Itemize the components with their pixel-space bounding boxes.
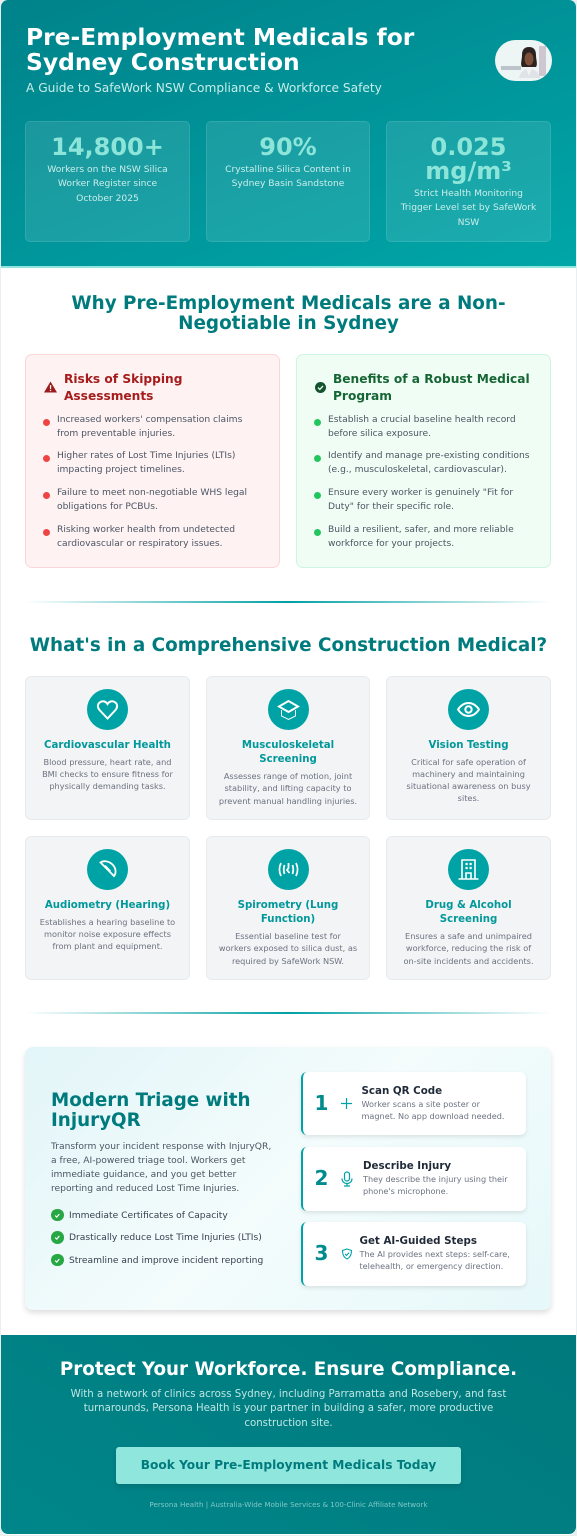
card: vision — [386, 676, 551, 820]
stat: trigger level: mg/m³ — [425, 157, 512, 185]
step 1: 1 — [314, 1090, 328, 1114]
step 2: 2 — [314, 1166, 328, 1190]
panel: InjuryQR — [25, 1047, 551, 1310]
risk list: Increased workers' compensation claims — [57, 414, 242, 424]
risk list: Higher rates of Lost Time Injuries (LTIs) — [57, 451, 235, 461]
title: Sydney Construction — [26, 48, 300, 76]
checklist — [51, 1209, 263, 1266]
benefits heading: Benefits of a Robust Medical — [333, 372, 530, 386]
footer panel — [1, 1335, 576, 1534]
risk list: Risking worker health from undetected — [57, 524, 235, 534]
card: musculoskeletal: Assesses range of motion, joint — [224, 771, 352, 781]
step 1 — [300, 1072, 526, 1135]
title — [26, 22, 414, 76]
step 1: magnet. No app download needed. — [362, 1111, 504, 1121]
footer description: construction site. — [244, 1418, 333, 1429]
InjuryQR description: immediate guidance, and you get better — [51, 1170, 236, 1180]
call to action button: Book Your Pre-Employment Medicals Today — [141, 1458, 436, 1472]
card: drug and alcohol: Ensures a safe and unimpaired — [405, 931, 532, 941]
benefit list: Identify and manage pre-existing conditions — [328, 451, 530, 461]
footer heading: Protect Your Workforce. Ensure Compliance. — [60, 1358, 517, 1380]
footer note: Persona Health | Australia-Wide Mobile Services & 100-Clinic Affiliate Network — [149, 1500, 428, 1509]
card: spirometry: Function) — [261, 914, 315, 925]
card: drug and alcohol: Screening — [440, 914, 497, 925]
benefits heading: Program — [333, 388, 392, 402]
stat: silica content: Crystalline Silica Content in — [225, 165, 351, 175]
card: vision: situational awareness on busy — [406, 781, 531, 791]
heading: why: Why Pre-Employment Medicals are a Non- — [71, 293, 506, 314]
icon: doctor photo — [495, 40, 552, 81]
card: cardiovascular — [25, 676, 190, 820]
card: spirometry: required by SafeWork NSW. — [232, 956, 344, 966]
step 2: phone's microphone. — [363, 1186, 448, 1196]
stat: trigger level: Strict Health Monitoring — [414, 189, 523, 199]
call to action button — [116, 1447, 461, 1484]
InjuryQR description: Transform your incident response with InjuryQR, — [51, 1142, 271, 1152]
step 2: Describe Injury — [363, 1160, 451, 1172]
stat: silica content: 90% — [259, 132, 317, 160]
card: audiometry: Establishes a hearing baseline to — [40, 916, 175, 926]
step 3: Get AI-Guided Steps — [360, 1235, 477, 1247]
benefit list: Duty" for their specific role. — [328, 502, 454, 512]
step 2: They describe the injury using their — [363, 1174, 508, 1184]
card: spirometry: Spirometry (Lung — [238, 900, 338, 911]
benefit list: Build a resilient, safer, and more reliable — [328, 524, 514, 534]
card: cardiovascular: physically demanding tasks. — [49, 781, 166, 791]
card: spirometry — [206, 836, 370, 980]
benefit list: Establish a crucial baseline health record — [328, 414, 516, 424]
card: musculoskeletal: Musculoskeletal — [242, 740, 334, 751]
risks heading: Risks of Skipping — [64, 372, 182, 386]
card: spirometry: Essential baseline test for — [235, 931, 341, 941]
checklist: Drastically reduce Lost Time Injuries (LTIs) — [69, 1233, 262, 1243]
heading: why: Negotiable in Sydney — [178, 313, 399, 334]
risk list: impacting project timelines. — [57, 465, 185, 475]
card: vision: Critical for safe operation of — [411, 756, 526, 766]
risk list — [43, 414, 247, 549]
stat: workers on register: Workers on the NSW Silica — [47, 165, 168, 175]
risk list: from preventable injuries. — [57, 429, 175, 439]
risk list: Failure to meet non-negotiable WHS legal — [57, 488, 247, 498]
InjuryQR description: a free, AI-powered triage tool. Workers get — [51, 1156, 245, 1166]
card: vision: machinery and maintaining — [412, 769, 525, 779]
stat: trigger level: Trigger Level set by SafeWork — [401, 203, 536, 213]
stat: workers on register: 14,800+ — [51, 132, 164, 160]
footer description — [71, 1389, 506, 1429]
card: audiometry: monitor noise exposure effects — [44, 929, 171, 939]
stat: silica content — [206, 121, 370, 242]
heading: why — [71, 293, 506, 334]
subtitle: A Guide to SafeWork NSW Compliance & Workforce Safety — [26, 80, 382, 94]
card: musculoskeletal: Screening — [259, 754, 317, 765]
checklist: Immediate Certificates of Capacity — [69, 1210, 228, 1220]
card: drug and alcohol: workforce, reducing the risk of — [406, 943, 531, 953]
step 3: telehealth, or emergency direction. — [360, 1261, 503, 1271]
stat: trigger level: NSW — [458, 218, 479, 228]
card: vision: Vision Testing — [428, 740, 509, 751]
card: musculoskeletal: stability, and lifting capacity to — [225, 783, 351, 793]
stat: trigger level — [386, 121, 551, 242]
card: cardiovascular: BMI checks to ensure fitness for — [42, 769, 173, 779]
risk list: obligations for PCBUs. — [57, 502, 158, 512]
benefit list: before silica exposure. — [328, 429, 431, 439]
card: vision: sites. — [458, 793, 479, 803]
benefit list: workforce for your projects. — [328, 539, 454, 549]
InjuryQR description: reporting and reduced Lost Time Injuries. — [51, 1184, 239, 1194]
InjuryQR heading: Modern Triage with — [51, 1090, 250, 1110]
risks heading — [64, 372, 182, 402]
step 3: 3 — [314, 1241, 328, 1265]
step 3: The AI provides next steps: self-care, — [360, 1249, 510, 1259]
stat: workers on register: October 2025 — [76, 194, 139, 204]
header panel — [1, 0, 576, 268]
InjuryQR heading: InjuryQR — [51, 1110, 141, 1131]
icon: check circle — [315, 382, 326, 393]
step 3 — [300, 1222, 526, 1286]
card: audiometry — [25, 836, 190, 980]
card: cardiovascular: Cardiovascular Health — [44, 740, 171, 751]
stat: trigger level: 0.025 — [431, 132, 506, 160]
card: cardiovascular: Blood pressure, heart rate, and — [44, 756, 171, 766]
card: audiometry: from plant and equipment. — [52, 941, 163, 951]
benefit list — [314, 414, 530, 549]
benefits heading — [333, 372, 530, 402]
icon: warning — [44, 382, 57, 392]
title: Pre-Employment Medicals for — [26, 22, 414, 50]
risk list: cardiovascular or respiratory issues. — [57, 539, 223, 549]
footer description: With a network of clinics across Sydney, including Parramatta and Rosebery, and fast — [71, 1389, 506, 1400]
card: drug and alcohol: on-site incidents and accidents. — [403, 956, 534, 966]
stat: silica content: Sydney Basin Sandstone — [232, 179, 344, 189]
benefit list: Ensure every worker is genuinely "Fit for — [328, 488, 513, 498]
InjuryQR description — [50, 1142, 271, 1194]
risks heading: Assessments — [64, 388, 153, 402]
card: drug and alcohol: Drug & Alcohol — [425, 900, 512, 911]
step 2 — [300, 1147, 526, 1210]
card: drug and alcohol — [386, 836, 551, 980]
step 1: Scan QR Code — [362, 1084, 442, 1096]
footer description: turnarounds, Persona Health is your partner in building a safer, more productive — [84, 1403, 493, 1414]
checklist: Streamline and improve incident reporting — [69, 1256, 263, 1266]
heading: comprehensive: What's in a Comprehensive Construction Medical? — [30, 635, 547, 656]
panel: risks — [25, 354, 280, 568]
card: musculoskeletal — [206, 676, 370, 820]
panel: benefits — [296, 354, 551, 568]
benefit list: (e.g., musculoskeletal, cardiovascular). — [328, 465, 507, 475]
card: audiometry: Audiometry (Hearing) — [45, 900, 170, 911]
InjuryQR heading — [51, 1090, 250, 1131]
card: spirometry: workers exposed to silica dust, as — [219, 943, 357, 953]
stat: workers on register: Worker Register since — [58, 179, 157, 189]
stat: workers on register — [25, 121, 190, 242]
step 1: Worker scans a site poster or — [362, 1098, 480, 1108]
card: musculoskeletal: prevent manual handling injuries. — [219, 796, 357, 806]
